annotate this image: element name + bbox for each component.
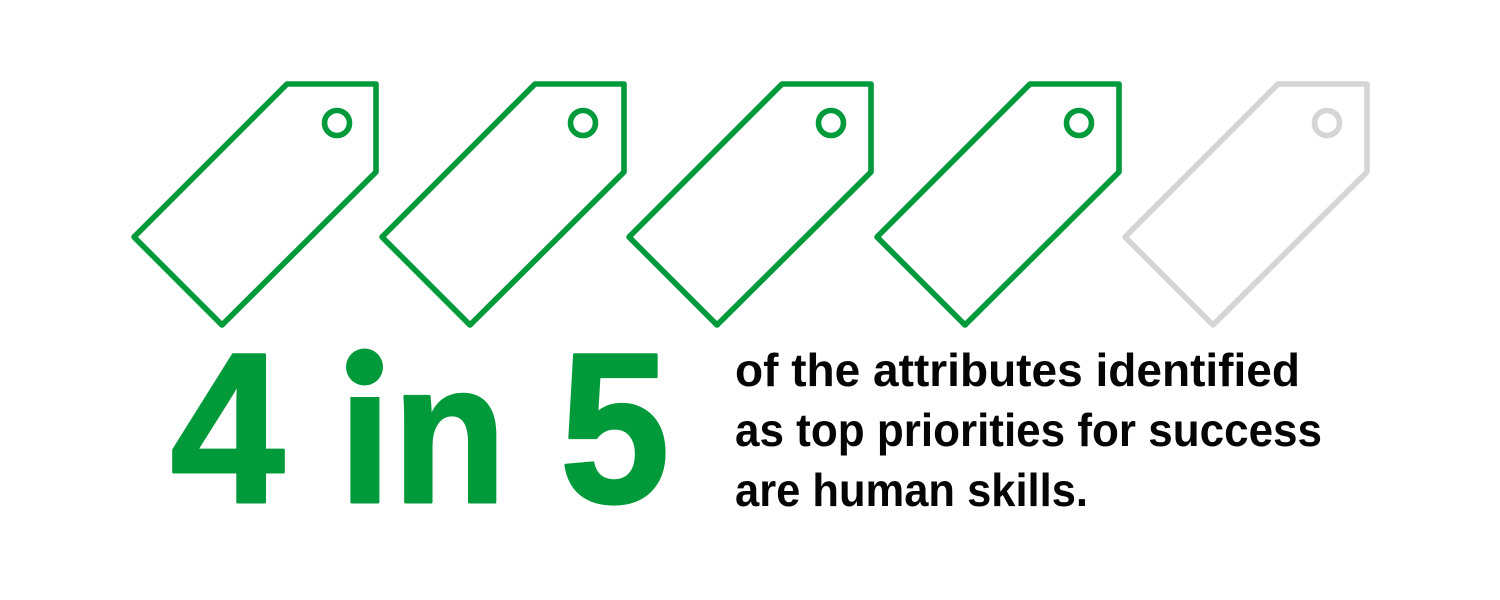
tag icon row (134, 84, 1367, 325)
big statistic: 4 (170, 309, 284, 548)
icon: grey tag 5 (1125, 84, 1367, 325)
big statistic: 5 (560, 309, 670, 548)
description text: are human skills. (735, 464, 1088, 516)
icon: green tag 3 (629, 84, 871, 325)
infographic canvas (131, 81, 1370, 506)
description text (735, 344, 1322, 516)
description text: of the attributes identified (735, 344, 1300, 396)
big statistic (172, 348, 666, 506)
big statistic: n (392, 322, 506, 545)
icon: green tag 1 (134, 84, 376, 325)
big statistic: i (338, 322, 392, 545)
icon: green tag 2 (382, 84, 624, 325)
description text: as top priorities for success (735, 404, 1322, 456)
icon: green tag 4 (877, 84, 1119, 325)
